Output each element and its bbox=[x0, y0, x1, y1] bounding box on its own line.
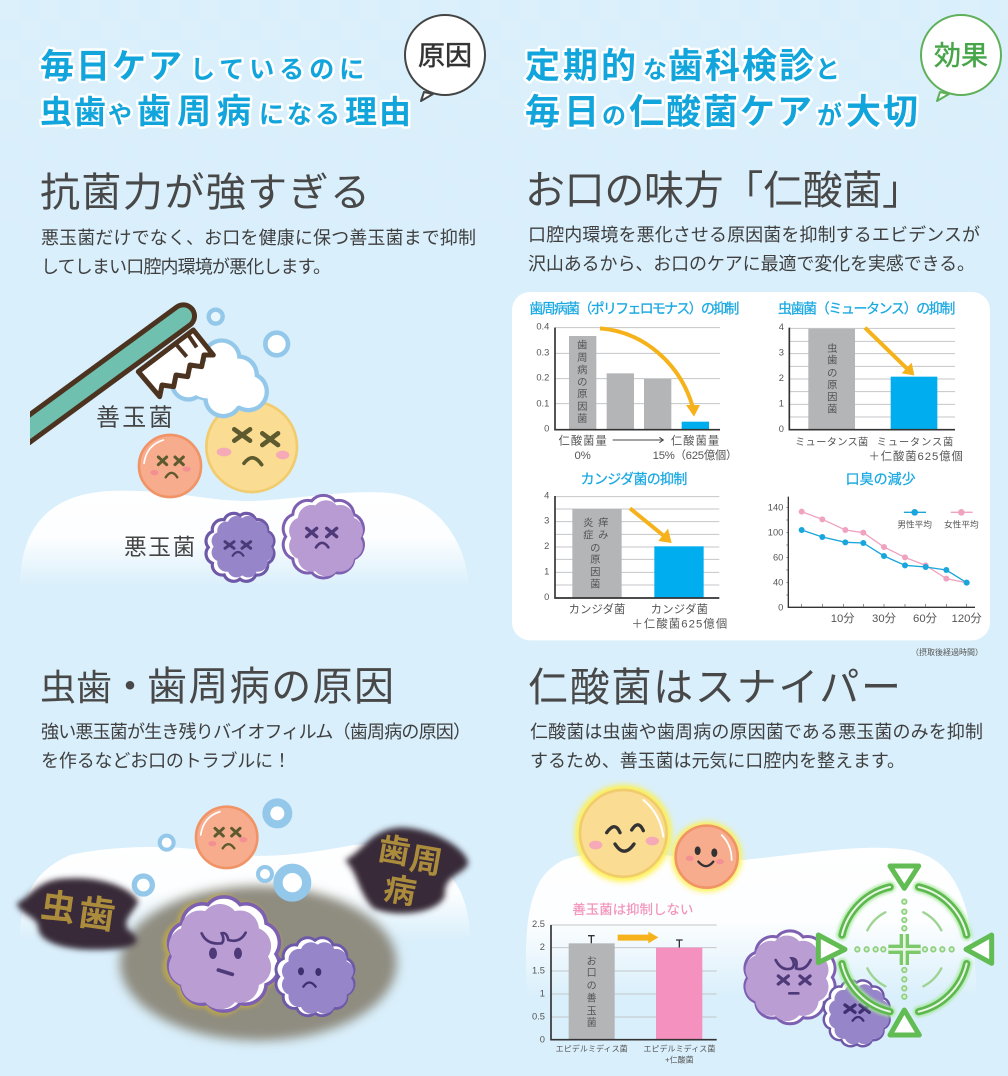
heading: 虫歯・歯周病の原因: 歯周病の原因 bbox=[147, 665, 394, 709]
header right: effect heading bbox=[525, 47, 920, 132]
chart: 口臭の減少: 男性平均 bbox=[897, 518, 932, 529]
chart: 善玉菌は抑制しない: 2 bbox=[540, 942, 545, 952]
orange face bbox=[139, 435, 201, 497]
chart: カンジダ菌の抑制: 菌 bbox=[590, 579, 600, 591]
chart: 虫歯菌の抑制: 菌 bbox=[827, 404, 837, 416]
chart: 善玉菌は抑制しない: エピデルミディス菌 bbox=[643, 1044, 715, 1054]
chart: カンジダ菌の抑制: の bbox=[590, 543, 600, 554]
header right: effect heading: が bbox=[817, 101, 842, 130]
note: intake time: （摂取後経過時間） bbox=[911, 647, 983, 657]
chart: 口臭の減少 bbox=[768, 471, 982, 625]
text block: 原因: を作るなどお口のトラブルに！ bbox=[41, 750, 291, 771]
chart: 口臭の減少: 120分 bbox=[952, 612, 982, 625]
bubbles bbox=[209, 310, 223, 324]
chart: カンジダ菌の抑制 bbox=[544, 471, 727, 631]
chart: 虫歯菌の抑制: 3 bbox=[779, 348, 784, 358]
text block: 原因: 強い悪玉菌が生き残りバイオフィルム（歯周病の原因） bbox=[41, 722, 471, 742]
text block: お口の味方: 口腔内環境を悪化させる原因菌を抑制するエビデンスが bbox=[528, 225, 980, 245]
header right: effect heading: 大切 bbox=[846, 93, 920, 132]
chart: 口臭の減少: 10分 bbox=[831, 612, 855, 625]
purple bacterium small bbox=[276, 938, 354, 1016]
chart: 歯周病菌の抑制: 0.1 bbox=[536, 398, 549, 408]
chart: 善玉菌は抑制しない: 玉 bbox=[587, 1006, 597, 1017]
text block: 抗菌力 bbox=[41, 228, 476, 277]
chart: 虫歯菌の抑制 bbox=[778, 300, 963, 463]
chart: 虫歯菌の抑制: 虫歯菌（ミュータンス）の抑制 bbox=[778, 300, 955, 316]
chart: 善玉菌は抑制しない: エピデルミディス菌 bbox=[556, 1044, 628, 1054]
heading: 虫歯・歯周病の原因 bbox=[40, 665, 394, 709]
dark spot: 虫歯: 虫 bbox=[38, 887, 78, 930]
chart: カンジダ菌の抑制: 炎 bbox=[583, 517, 593, 529]
chart: カンジダ菌の抑制: 0 bbox=[544, 592, 549, 602]
gum bbox=[526, 848, 977, 997]
chart: 虫歯菌の抑制: ミュータンス菌 bbox=[795, 436, 868, 448]
chart: 善玉菌は抑制しない bbox=[532, 901, 717, 1065]
chart: 善玉菌は抑制しない: +仁酸菌 bbox=[665, 1055, 694, 1065]
chart: 善玉菌は抑制しない: 口 bbox=[587, 968, 597, 979]
header right: effect heading: な bbox=[643, 57, 667, 84]
speech bubble: 効果 bbox=[921, 15, 1001, 101]
chart: 口臭の減少: 140 bbox=[768, 503, 783, 513]
chart: カンジダ菌の抑制: 2 bbox=[544, 541, 549, 551]
text block: スナイパー: 仁酸菌は虫歯や歯周病の原因菌である悪玉菌のみを抑制 bbox=[530, 722, 983, 742]
chart: カンジダ菌の抑制: 因 bbox=[590, 566, 600, 578]
chart: 口臭の減少: 60分 bbox=[913, 612, 938, 625]
chart: 虫歯菌の抑制: 1 bbox=[779, 399, 784, 409]
header right: effect heading: 仁酸菌ケア bbox=[629, 93, 814, 132]
chart: 口臭の減少: 60 bbox=[773, 553, 783, 563]
plaque bbox=[120, 886, 397, 1041]
chart: カンジダ菌の抑制: 3 bbox=[544, 516, 549, 526]
chart: 歯周病菌の抑制: 0 bbox=[544, 424, 549, 434]
panel: charts bbox=[512, 292, 990, 640]
sun face bbox=[575, 785, 672, 882]
chart: 口臭の減少: 口臭の減少 bbox=[846, 471, 916, 487]
illustration: plaque and bacteria bbox=[17, 802, 470, 1041]
text block: 抗菌力: 悪玉菌だけでなく、お口を健康に保つ善玉菌まで抑制 bbox=[41, 228, 476, 248]
chart: 歯周病菌の抑制: 0.2 bbox=[536, 373, 549, 383]
bubbles bbox=[134, 802, 307, 897]
chart: 善玉菌は抑制しない: 0.5 bbox=[532, 1011, 545, 1021]
chart: カンジダ菌の抑制: 1 bbox=[544, 566, 549, 576]
text block: スナイパー bbox=[530, 722, 983, 771]
chart: 歯周病菌の抑制: 病 bbox=[577, 364, 587, 376]
chart: 善玉菌は抑制しない: 善玉菌は抑制しない bbox=[572, 901, 693, 917]
purple bacterium small bbox=[206, 513, 274, 581]
purple bacterium large bbox=[163, 894, 281, 1016]
dark spot: 虫歯 bbox=[17, 878, 138, 950]
purple bacterium large bbox=[283, 495, 363, 578]
gum bbox=[20, 844, 470, 940]
chart: 虫歯菌の抑制: 歯 bbox=[827, 355, 837, 367]
label: 善玉菌: 善玉菌 bbox=[96, 404, 175, 431]
chart: 歯周病菌の抑制: の bbox=[577, 378, 587, 389]
chart: 歯周病菌の抑制: 仁酸菌量 bbox=[558, 433, 607, 447]
header right: effect heading: 毎日 bbox=[525, 93, 603, 132]
chart: カンジダ菌の抑制: 症 bbox=[583, 530, 593, 542]
chart: 虫歯菌の抑制: 因 bbox=[827, 391, 837, 403]
label: 悪玉菌: 悪玉菌 bbox=[124, 534, 197, 560]
chart: 口臭の減少: 0 bbox=[778, 603, 783, 613]
chart: 善玉菌は抑制しない: 1.5 bbox=[532, 965, 545, 975]
illustration: toothbrush and bacteria bbox=[20, 310, 468, 587]
header right: effect heading: の bbox=[602, 103, 626, 130]
heading: お口の味方: お口の味方「仁酸菌」 bbox=[525, 169, 922, 213]
chart: 歯周病菌の抑制: 周 bbox=[577, 352, 587, 364]
header left: reason heading: 理由 bbox=[345, 94, 413, 130]
yellow face bbox=[206, 401, 297, 492]
header right: effect heading: 歯科検診 bbox=[668, 47, 816, 86]
purple bacterium small bbox=[824, 980, 890, 1046]
chart: カンジダ菌の抑制: ＋仁酸菌625億個 bbox=[631, 617, 727, 631]
chart: 虫歯菌の抑制: 0 bbox=[779, 424, 784, 434]
chart: 歯周病菌の抑制: 因 bbox=[577, 401, 587, 413]
text block: お口の味方: 沢山あるから、お口のケアに最適で変化を実感できる。 bbox=[528, 254, 975, 274]
speech bubble: 原因: 原因 bbox=[418, 41, 472, 71]
chart: カンジダ菌の抑制: 痒 bbox=[598, 517, 608, 529]
chart: 善玉菌は抑制しない: 2.5 bbox=[532, 919, 545, 929]
chart: 虫歯菌の抑制: 4 bbox=[779, 322, 784, 332]
chart: 善玉菌は抑制しない: お bbox=[587, 955, 597, 967]
chart: 歯周病菌の抑制: 0.4 bbox=[536, 322, 549, 332]
chart: 歯周病菌の抑制: 原 bbox=[577, 389, 587, 401]
toothbrush bbox=[20, 316, 213, 436]
chart: 口臭の減少: 40 bbox=[773, 578, 783, 588]
chart: カンジダ菌の抑制: み bbox=[598, 531, 608, 542]
chart: カンジダ菌の抑制: カンジダ菌 bbox=[651, 602, 708, 616]
chart: カンジダ菌の抑制: カンジダ菌 bbox=[569, 602, 625, 616]
text block: スナイパー: するため、善玉菌は元気に口腔内を整えます。 bbox=[530, 751, 905, 771]
chart: 口臭の減少: 100 bbox=[768, 528, 783, 538]
chart: 歯周病菌の抑制: 菌 bbox=[577, 413, 587, 425]
chart: 虫歯菌の抑制: 虫 bbox=[827, 343, 837, 355]
chart: 虫歯菌の抑制: ミュータンス菌 bbox=[877, 436, 953, 448]
chart: 歯周病菌の抑制: 歯周病菌（ポリフェロモナス）の抑制 bbox=[529, 300, 739, 316]
text block: 抗菌力: してしまい口腔内環境が悪化します。 bbox=[41, 257, 331, 277]
header left: reason heading: 虫歯 bbox=[40, 94, 108, 130]
dark spot: 虫歯: 歯 bbox=[76, 891, 118, 937]
icon: green crosshair bbox=[818, 866, 992, 1035]
header right: effect heading: と bbox=[815, 56, 840, 84]
illustration: sniper and good bacteria bbox=[526, 785, 992, 1065]
text block: お口の味方 bbox=[528, 225, 980, 274]
dark spot: 歯周病: 病 bbox=[381, 870, 419, 911]
chart: 歯周病菌の抑制: 15%（625億個） bbox=[653, 449, 737, 462]
header right: effect heading: 定期的 bbox=[525, 47, 639, 86]
chart: 善玉菌は抑制しない: 1 bbox=[540, 988, 545, 998]
orange face bbox=[196, 807, 257, 868]
chart: 口臭の減少: 女性平均 bbox=[944, 518, 979, 529]
chart: 善玉菌は抑制しない: の bbox=[587, 981, 597, 992]
heading: 虫歯・歯周病の原因: ・ bbox=[110, 665, 150, 709]
header left: reason heading bbox=[40, 48, 413, 131]
dark spot: 歯周病 bbox=[345, 827, 468, 913]
chart: 虫歯菌の抑制: ＋仁酸菌625億個 bbox=[868, 449, 963, 463]
chart: 虫歯菌の抑制: 原 bbox=[827, 380, 837, 392]
header left: reason heading: になる bbox=[259, 101, 343, 129]
speech bubble: 原因 bbox=[405, 15, 485, 101]
chart: 善玉菌は抑制しない: 0 bbox=[540, 1034, 545, 1044]
chart: 善玉菌は抑制しない: 善 bbox=[587, 992, 597, 1005]
chart: 善玉菌は抑制しない: 菌 bbox=[587, 1017, 597, 1029]
chart: 虫歯菌の抑制: の bbox=[827, 368, 837, 379]
header left: reason heading: しているのに bbox=[190, 56, 369, 84]
dark spot: 歯周病: 歯 bbox=[375, 830, 413, 871]
purple bacterium large bbox=[745, 931, 835, 1024]
chart: カンジダ菌の抑制: 原 bbox=[590, 554, 600, 566]
chart: 歯周病菌の抑制: 0.3 bbox=[536, 347, 549, 357]
header left: reason heading: 毎日ケア bbox=[40, 48, 184, 86]
speech bubble: 効果: 効果 bbox=[934, 41, 988, 71]
chart: カンジダ菌の抑制: カンジダ菌の抑制 bbox=[581, 471, 687, 487]
chart: 虫歯菌の抑制: 2 bbox=[779, 373, 784, 383]
chart: 歯周病菌の抑制: 仁酸菌量 bbox=[671, 433, 719, 447]
heading: 抗菌力が強すぎる: 抗菌力が強すぎる bbox=[40, 171, 370, 215]
chart: 歯周病菌の抑制 bbox=[529, 300, 739, 462]
header left: reason heading: や bbox=[108, 102, 132, 129]
chart: 口臭の減少: 30分 bbox=[872, 612, 897, 625]
chart: 歯周病菌の抑制: 歯 bbox=[577, 340, 587, 352]
foam bbox=[170, 338, 269, 418]
orange smile face bbox=[672, 822, 742, 892]
chart: 歯周病菌の抑制: 0% bbox=[574, 450, 591, 462]
header left: reason heading: 歯周病 bbox=[137, 93, 257, 131]
heading: 虫歯・歯周病の原因: 虫歯 bbox=[40, 667, 112, 708]
heading: 仁酸菌はスナイパー: 仁酸菌はスナイパー bbox=[528, 666, 901, 710]
text block: 原因 bbox=[41, 722, 471, 771]
gum bbox=[20, 491, 468, 587]
chart: カンジダ菌の抑制: 4 bbox=[544, 490, 549, 500]
dark spot: 歯周病: 周 bbox=[407, 840, 445, 881]
